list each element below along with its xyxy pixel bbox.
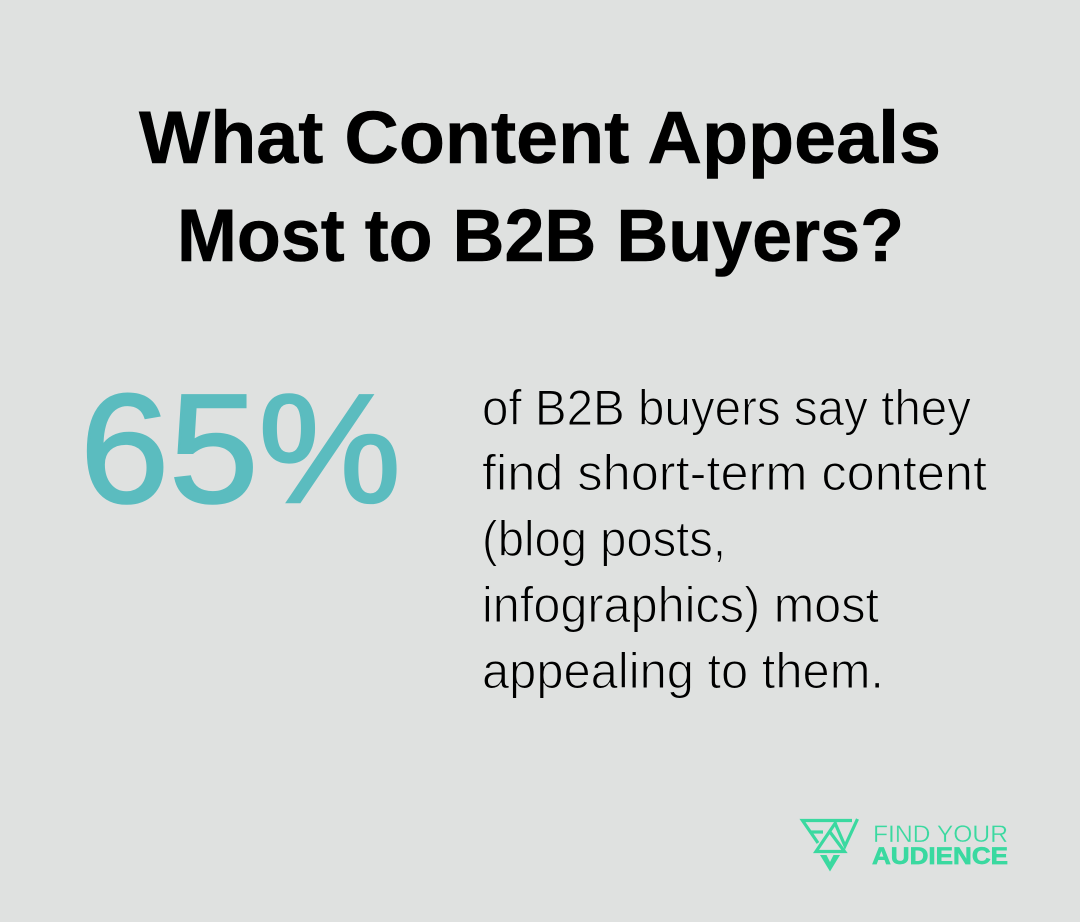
logo: Find Your Audience xyxy=(802,819,1008,872)
title xyxy=(139,96,941,277)
description text: find short-term content xyxy=(482,445,987,501)
description text xyxy=(482,380,987,699)
description text: (blog posts, xyxy=(482,511,726,567)
title: What Content Appeals xyxy=(139,96,941,179)
title: Most to B2B Buyers? xyxy=(177,194,904,277)
description text: of B2B buyers say they xyxy=(482,380,971,436)
description text: infographics) most xyxy=(482,577,879,633)
logo icon xyxy=(802,819,858,872)
logo: Find Your Audience: AUDIENCE xyxy=(872,843,1008,870)
big statistic: 65%: 65% xyxy=(80,362,401,535)
logo wordmark: FIND YOUR xyxy=(873,821,1008,848)
description text: appealing to them. xyxy=(482,643,884,699)
